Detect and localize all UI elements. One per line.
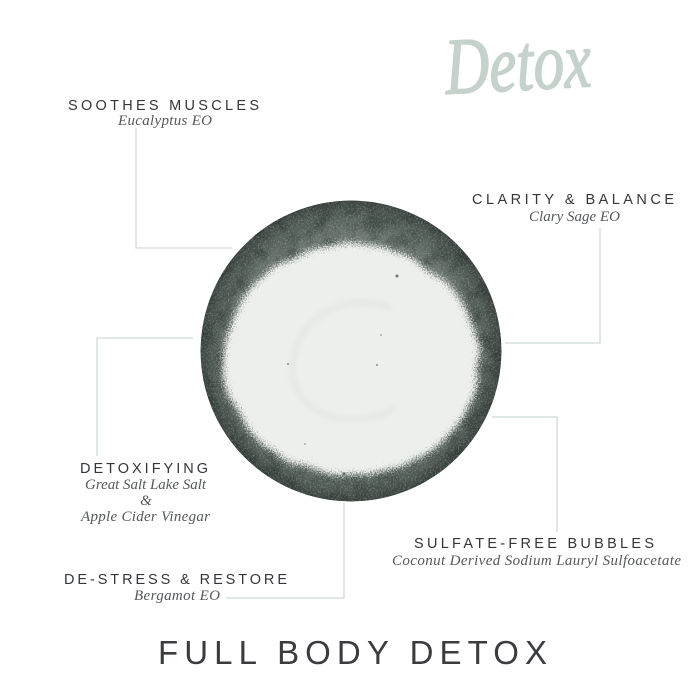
label: soothes muscles: Eucalyptus EO [117, 113, 212, 129]
label: sulfate-free bubbles: Coconut Derived Sodium Lauryl Sulfoacetate [392, 553, 681, 569]
label: detoxifying [80, 461, 210, 525]
footer heading: FULL BODY DETOX [158, 634, 547, 671]
connector: detoxifying [97, 338, 193, 456]
label: detoxifying: & [140, 493, 152, 509]
label: de-stress and restore: DE-STRESS & RESTORE [64, 572, 287, 588]
connector: sulfate-free bubbles [492, 417, 557, 532]
connector: de-stress and restore [226, 503, 344, 598]
label: clarity and balance [472, 192, 674, 225]
title: Detox script: Detox [442, 16, 593, 112]
bath bomb image [200, 200, 502, 502]
label: sulfate-free bubbles: SULFATE-FREE BUBBLES [414, 536, 654, 552]
label: soothes muscles [68, 98, 259, 129]
label: detoxifying: Apple Cider Vinegar [80, 509, 210, 525]
label: de-stress and restore [64, 572, 287, 604]
label: clarity and balance: CLARITY & BALANCE [472, 192, 674, 208]
label: clarity and balance: Clary Sage EO [529, 209, 620, 225]
label: de-stress and restore: Bergamot EO [134, 588, 220, 604]
label: sulfate-free bubbles [392, 536, 681, 569]
label: detoxifying: DETOXIFYING [80, 461, 208, 477]
connector: clarity and balance [505, 228, 600, 343]
label: soothes muscles: SOOTHES MUSCLES [68, 98, 259, 114]
connector: soothes muscles [136, 128, 232, 248]
label: detoxifying: Great Salt Lake Salt [85, 477, 207, 493]
